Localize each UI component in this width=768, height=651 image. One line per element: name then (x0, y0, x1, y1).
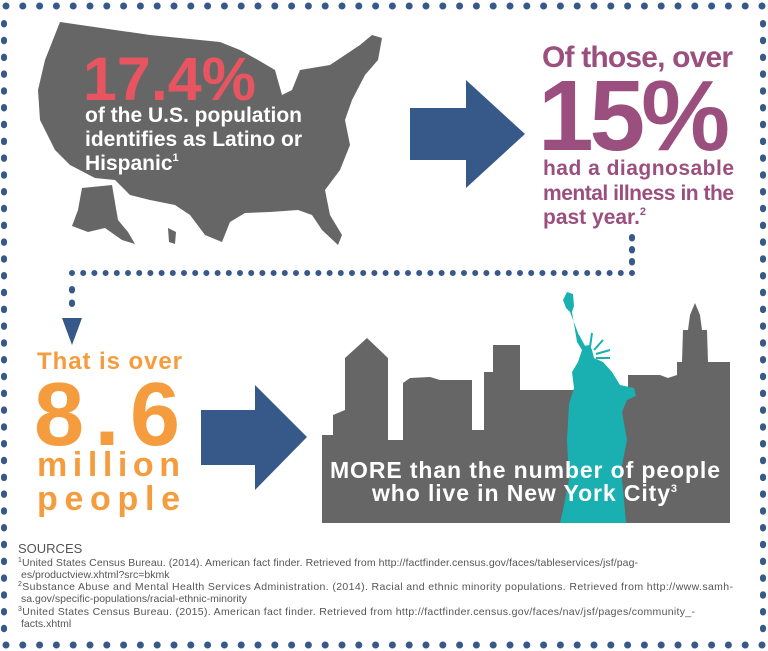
sources: United States Census Bureau. (2015). American fact finder. Retrieved from http://factfinder.census.gov/faces/nav/jsf/pages/community_- (22, 606, 695, 618)
text: 17.4% stat: 17.4% (83, 45, 256, 113)
text: NYC comparison: who live in New York City (372, 480, 670, 506)
arrow 1 (410, 80, 525, 188)
text: 8.6 million (34, 348, 182, 518)
text: 15% stat: mental illness in the (543, 182, 734, 205)
text: 17.4% stat: Hispanic (85, 152, 173, 175)
text: NYC comparison: MORE than the number of people (330, 457, 720, 483)
text: 15% stat: past year. (543, 206, 640, 229)
text: 8.6 million: million (37, 446, 180, 484)
text: NYC comparison: 3 (671, 483, 677, 495)
icon: statue of liberty (560, 292, 636, 523)
sources: United States Census Bureau. (2014). American fact finder. Retrieved from http://factfinder.census.gov/faces/tableservices/jsf/pag- (22, 557, 639, 569)
skyline (322, 303, 730, 523)
text: 8.6 million: people (37, 480, 180, 518)
sources: es/productview.xhtml?src=bkmk (21, 569, 170, 581)
dotted connector arrow (62, 237, 632, 345)
sources: 2 (18, 581, 22, 588)
sources: SOURCES (18, 541, 83, 556)
text: 17.4% stat: 1 (173, 152, 179, 164)
text: NYC comparison (330, 457, 720, 506)
sources: 1 (18, 557, 22, 564)
sources: facts.xhtml (21, 618, 71, 630)
text: 8.6 million: 8.6 (34, 365, 180, 465)
text: 8.6 million: That is over (37, 348, 182, 375)
text: 17.4% stat: identifies as Latino or (85, 128, 302, 151)
text: 17.4% stat: of the U.S. population (85, 104, 302, 127)
arrow 2 (201, 385, 307, 490)
sources: Substance Abuse and Mental Health Services Administration. (2014). Racial and ethnic minority populations. Retrieved from http://www.samh- (22, 581, 733, 593)
sources (18, 541, 733, 630)
sources: 3 (18, 606, 22, 613)
map: USA silhouette (38, 22, 382, 245)
text: 15% stat (538, 41, 734, 229)
text: 17.4% stat (83, 45, 302, 175)
text: 15% stat: 15% (538, 60, 730, 172)
text: 15% stat: 2 (640, 206, 646, 218)
text: 15% stat: had a diagnosable (543, 157, 734, 180)
sources: sa.gov/specific-populations/racial-ethnic-minority (21, 593, 248, 605)
text: 15% stat: Of those, over (542, 41, 733, 74)
